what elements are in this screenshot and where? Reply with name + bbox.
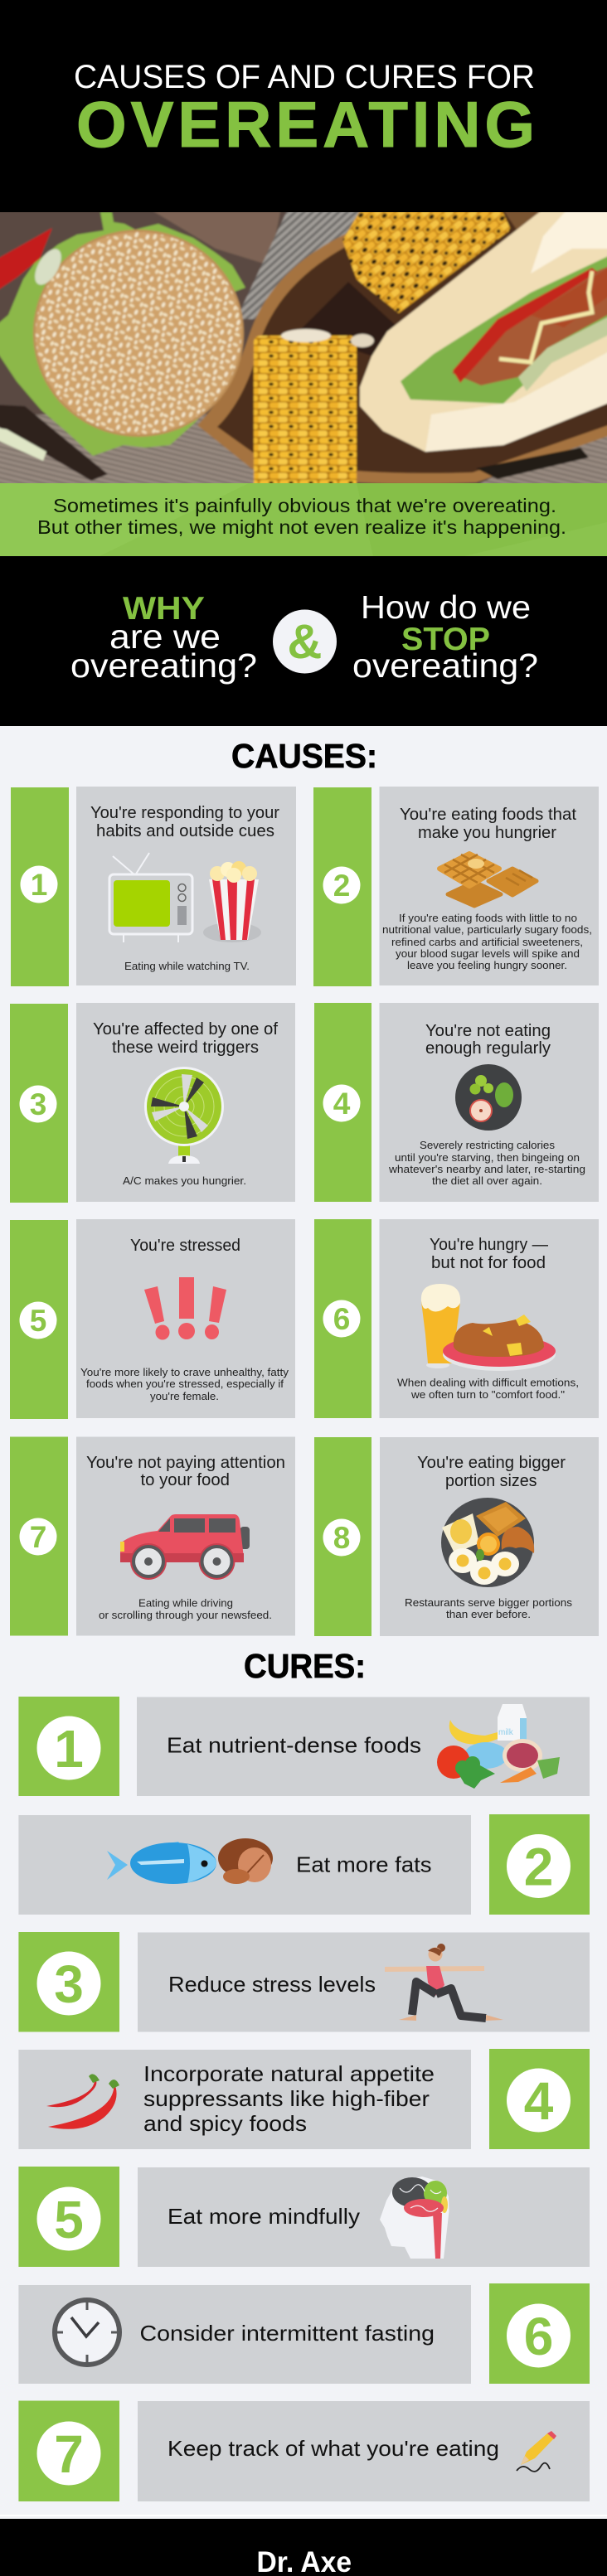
number 3: 3 (54, 1954, 84, 2014)
cause 2 heading: make you hungrier (418, 824, 556, 842)
cause 7 heading (86, 1454, 285, 1489)
panel: cause 8 (314, 1437, 599, 1636)
number 7 (36, 2422, 101, 2485)
question: why are we overeating: WHY (123, 591, 205, 627)
question: why are we overeating (70, 591, 257, 685)
number 2: 2 (333, 869, 350, 903)
panel: cure 3 (18, 1932, 590, 2032)
cause 7 caption (99, 1596, 272, 1621)
number 6 (507, 2304, 571, 2367)
number 1 (36, 1716, 101, 1780)
intro text: But other times, we might not even realize it's happening. (37, 516, 566, 538)
cause 7 caption: Eating while driving (138, 1596, 233, 1610)
number 3: 3 (30, 1087, 46, 1121)
cause 8 heading: You're eating bigger (417, 1454, 566, 1472)
cause 1 caption: Eating while watching TV. (124, 960, 250, 972)
cause 6 caption: we often turn to "comfort food." (410, 1388, 565, 1401)
number 7: 7 (30, 1520, 46, 1554)
cure 2 text: Eat more fats (296, 1852, 431, 1876)
cure 3 text: Reduce stress levels (168, 1972, 376, 1997)
icon: popcorn (203, 861, 261, 942)
cause 6 heading: You're hungry — (430, 1236, 548, 1254)
icon: pencil (517, 2431, 556, 2472)
cause 3 caption: A/C makes you hungrier. (123, 1174, 246, 1187)
cause 2 caption: refined carbs and artificial sweeteners, (391, 936, 583, 948)
cause 5 caption: you're female. (150, 1390, 219, 1402)
panel: cause 5 (10, 1219, 295, 1419)
cause 2 caption: your blood sugar levels will spike and (396, 947, 580, 960)
panel: cause 1 (11, 787, 296, 986)
number 8: 8 (333, 1521, 350, 1555)
icon: red car (120, 1514, 250, 1580)
panel: cure 5 (18, 2167, 590, 2267)
ampersand badge (273, 610, 337, 673)
cause 4 heading (425, 1022, 551, 1058)
intro text (37, 495, 566, 538)
cure 4 text: and spicy foods (143, 2111, 307, 2136)
number 5 (36, 2186, 101, 2251)
panel: cure 6 (18, 2283, 590, 2384)
icon: clock (55, 2300, 119, 2365)
number 3 (20, 1086, 56, 1122)
icon: exclamation marks (144, 1277, 226, 1339)
number 5 (20, 1301, 56, 1339)
number 2 (323, 867, 360, 903)
cause 1 heading: You're responding to your (90, 804, 279, 822)
title: overeating: OVEREATING (76, 88, 535, 161)
question: how do we stop overeating: How do we (361, 590, 531, 626)
icon: fan (146, 1068, 222, 1164)
cause 4 caption: the diet all over again. (432, 1174, 542, 1187)
panel: cause 3 (10, 1003, 295, 1203)
number 3 (36, 1951, 101, 2016)
number 6: 6 (333, 1302, 350, 1336)
cause 8 caption (405, 1596, 573, 1620)
icon: chili peppers (46, 2070, 119, 2129)
number 7: 7 (54, 2424, 84, 2484)
cure 4 text: suppressants like high-fiber (143, 2086, 430, 2111)
intro text: Sometimes it's painfully obvious that we're overeating. (53, 495, 556, 516)
question: why are we overeating: overeating? (70, 646, 257, 685)
question: how do we stop overeating: STOP (401, 622, 490, 657)
question: how do we stop overeating: overeating? (352, 646, 538, 685)
cure 4 text: Incorporate natural appetite (143, 2061, 435, 2086)
icon: fish (107, 1842, 216, 1884)
icon: healthy foods: milk (498, 1728, 514, 1737)
cause 2 caption (382, 912, 592, 971)
panel: cause 4 (314, 1003, 599, 1202)
cause 4 caption: whatever's nearby and later, re-starting (388, 1163, 585, 1175)
cause 8 heading: portion sizes (445, 1472, 537, 1490)
cure 5 text: Eat more mindfully (168, 2204, 360, 2229)
title line: causes of and cures for: CAUSES OF AND CURES FOR (74, 59, 535, 95)
hot dog (360, 204, 607, 452)
cause 2 heading (400, 806, 576, 842)
icon: yoga pose (385, 1944, 503, 2021)
number 1: 1 (54, 1719, 84, 1779)
cause 4 caption: Severely restricting calories (420, 1139, 556, 1151)
number 8 (323, 1518, 360, 1557)
cause 6 caption (397, 1376, 579, 1401)
cause 4 heading: You're not eating (425, 1022, 551, 1040)
icon: healthy foods (437, 1704, 560, 1789)
cause 4 caption: until you're starving, then bingeing on (395, 1151, 580, 1164)
number 4: 4 (524, 2071, 554, 2131)
intro band (0, 483, 607, 556)
cause 2 caption: nutritional value, particularly sugary foods, (382, 923, 592, 936)
cause 5 caption: foods when you're stressed, especially if (86, 1378, 284, 1390)
number 1 (20, 865, 58, 903)
cause 7 heading: to your food (141, 1471, 230, 1489)
cause 5 caption: You're more likely to crave unhealthy, fatty (80, 1366, 289, 1378)
cause 1 heading: habits and outside cues (96, 822, 274, 840)
number 4 (507, 2069, 571, 2132)
number 5: 5 (30, 1304, 46, 1338)
cure 1 text: Eat nutrient-dense foods (167, 1732, 421, 1757)
cause 1 heading (90, 804, 279, 840)
number 6 (323, 1300, 360, 1338)
heading: cures: CURES: (244, 1647, 366, 1685)
cause 2 caption: If you're eating foods with little to no (399, 912, 577, 924)
header panel (0, 0, 607, 212)
number 5: 5 (54, 2190, 84, 2249)
question: why are we overeating: are we (109, 617, 221, 656)
panel: cause 2 (313, 787, 599, 986)
hero photo: burger, corn and hot dog (0, 204, 607, 491)
cause 8 caption: than ever before. (446, 1608, 531, 1620)
cure 7 text: Keep track of what you're eating (168, 2436, 499, 2461)
icon: walnut (218, 1838, 273, 1884)
cause 6 caption: When dealing with difficult emotions, (397, 1376, 579, 1389)
ampersand badge: & (288, 615, 322, 669)
number 2: 2 (524, 1837, 553, 1896)
cause 4 heading: enough regularly (425, 1039, 551, 1058)
number 2 (507, 1834, 571, 1898)
number 1: 1 (31, 868, 47, 902)
number 4: 4 (333, 1087, 351, 1121)
cause 5 caption (80, 1366, 289, 1402)
panel: cure 7 (18, 2400, 590, 2501)
cause 7 caption: or scrolling through your newsfeed. (99, 1609, 272, 1621)
cure 6 text: Consider intermittent fasting (139, 2321, 435, 2346)
number 4 (323, 1084, 360, 1122)
icon: beer and chicken plate (421, 1284, 556, 1371)
cause 3 heading: You're affected by one of (93, 1020, 278, 1039)
icon: breakfast plate (441, 1498, 534, 1587)
icon: head and brain (380, 2177, 449, 2259)
panel: cure 1 (18, 1697, 590, 1796)
questions panel (0, 556, 607, 726)
cause 6 heading (430, 1236, 548, 1272)
heading: causes: CAUSES: (231, 737, 377, 775)
cause 2 caption: leave you feeling hungry sooner. (407, 959, 567, 971)
cause 6 heading: but not for food (431, 1254, 546, 1272)
question: how do we stop overeating (352, 590, 538, 685)
cause 3 heading (93, 1020, 278, 1057)
footer (0, 2515, 607, 2576)
number 6: 6 (524, 2307, 553, 2366)
panel: cause 7 (10, 1437, 295, 1636)
panel: cause 6 (314, 1219, 599, 1418)
panel: cure 4 (18, 2049, 590, 2149)
number 7 (20, 1518, 56, 1555)
panel: cure 2 (18, 1814, 590, 1915)
cause 2 heading: You're eating foods that (400, 806, 576, 824)
cause 5 heading: You're stressed (130, 1237, 240, 1255)
cause 7 heading: You're not paying attention (86, 1454, 285, 1472)
icon: plate with apple and greens (455, 1064, 522, 1131)
cause 3 heading: these weird triggers (112, 1039, 259, 1057)
burger (0, 212, 245, 456)
icon: television (109, 853, 192, 942)
cause 8 caption: Restaurants serve bigger portions (405, 1596, 573, 1609)
cure 4 text (143, 2061, 435, 2136)
bottom corn (254, 329, 374, 491)
icon: waffles (439, 854, 537, 906)
cause 8 heading (417, 1454, 566, 1490)
top corn (342, 204, 511, 313)
cause 4 caption (388, 1139, 585, 1187)
